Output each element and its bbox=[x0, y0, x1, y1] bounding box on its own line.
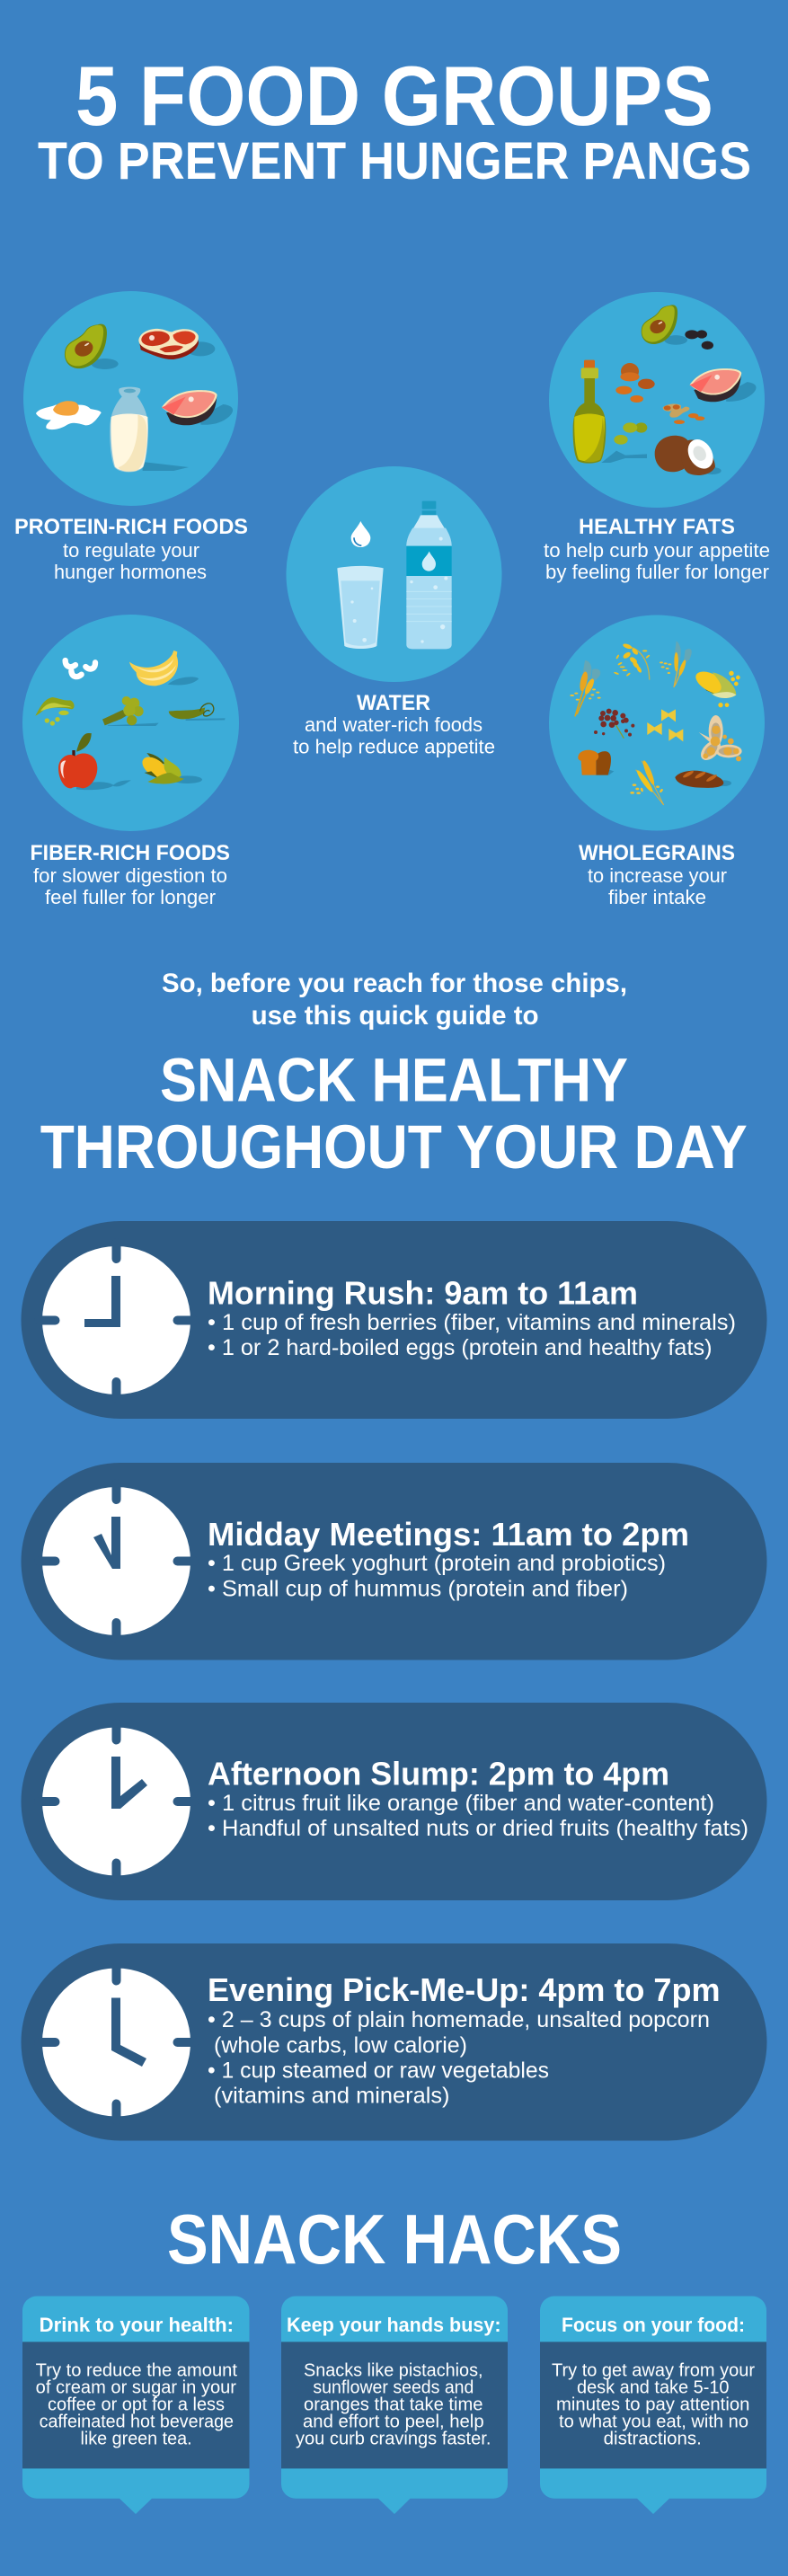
card text bbox=[36, 2360, 237, 2448]
card text: you curb cravings faster. bbox=[296, 2429, 491, 2448]
protein label bbox=[14, 515, 248, 583]
icon: wholegrain foods bbox=[570, 641, 742, 805]
schedule text: • 1 cup of fresh berries (fiber, vitamins and minerals) bbox=[208, 1310, 736, 1335]
card text: Try to get away from your bbox=[552, 2360, 755, 2380]
card body bbox=[540, 2341, 766, 2468]
icon: fiber foods bbox=[35, 651, 226, 790]
panel: morning rush bbox=[22, 1221, 767, 1419]
heading: snack healthy: SNACK HEALTHY bbox=[160, 1046, 628, 1115]
schedule text: (whole carbs, low calorie) bbox=[214, 2033, 467, 2058]
panel: wholegrains bbox=[549, 615, 765, 908]
intro text: use this quick guide to bbox=[252, 1001, 539, 1031]
water label: and water-rich foods bbox=[305, 713, 483, 736]
schedule text: • 2 – 3 cups of plain homemade, unsalted popcorn bbox=[208, 2007, 710, 2032]
card text: like green tea. bbox=[81, 2429, 192, 2448]
title: TO PREVENT HUNGER PANGS bbox=[38, 132, 751, 190]
card: drink to your health bbox=[22, 2297, 250, 2514]
card body bbox=[22, 2341, 250, 2468]
card text: and effort to peel, help bbox=[303, 2412, 484, 2431]
wholegrains label: fiber intake bbox=[608, 886, 706, 908]
card text bbox=[552, 2360, 755, 2448]
heading: snack healthy bbox=[40, 1046, 748, 1182]
card text: to what you eat, with no bbox=[559, 2412, 748, 2431]
schedule text: • 1 cup steamed or raw vegetables bbox=[208, 2058, 549, 2083]
title: 5 FOOD GROUPS bbox=[75, 49, 713, 143]
schedule text: Morning Rush: 9am to 11am bbox=[208, 1275, 638, 1312]
schedule text bbox=[208, 1516, 689, 1602]
fiber label: FIBER-RICH FOODS bbox=[31, 841, 230, 865]
card text: sunflower seeds and bbox=[313, 2377, 474, 2397]
title bbox=[38, 49, 751, 190]
fats label: to help curb your appetite bbox=[544, 539, 770, 562]
panel: midday meetings bbox=[22, 1463, 767, 1660]
schedule text: (vitamins and minerals) bbox=[214, 2084, 449, 2109]
icon: fats foods bbox=[573, 305, 757, 475]
card text: oranges that take time bbox=[304, 2395, 483, 2414]
panel: protein-rich foods bbox=[14, 291, 248, 583]
card text: caffeinated hot beverage bbox=[40, 2412, 234, 2431]
card text: coffee or opt for a less bbox=[48, 2395, 225, 2414]
schedule text: Evening Pick-Me-Up: 4pm to 7pm bbox=[208, 1971, 721, 2008]
water label: to help reduce appetite bbox=[293, 735, 495, 758]
schedule text: • 1 cup Greek yoghurt (protein and probiotics) bbox=[208, 1551, 666, 1576]
wholegrains label bbox=[579, 841, 735, 908]
pill background bbox=[22, 1221, 767, 1419]
icon: clock 4:00 bbox=[39, 1964, 194, 2120]
panel: fiber-rich foods bbox=[22, 615, 239, 908]
schedule text: • 1 citrus fruit like orange (fiber and water-content) bbox=[208, 1791, 714, 1816]
fiber label: for slower digestion to bbox=[33, 864, 227, 887]
card text: of cream or sugar in your bbox=[36, 2377, 236, 2397]
schedule text bbox=[208, 1971, 721, 2109]
card text: minutes to pay attention bbox=[556, 2395, 749, 2414]
water label: WATER bbox=[357, 691, 430, 715]
protein circle bbox=[23, 291, 238, 506]
panel: evening pick-me-up bbox=[22, 1943, 767, 2140]
panel: afternoon slump bbox=[22, 1703, 767, 1900]
fats label bbox=[544, 515, 770, 583]
heading: snack hacks: SNACK HACKS bbox=[167, 2200, 622, 2279]
card shape bbox=[540, 2297, 766, 2514]
icon: clock 9:00 bbox=[39, 1243, 194, 1398]
card: focus on your food bbox=[540, 2297, 766, 2514]
schedule text: • Handful of unsalted nuts or dried fruits (healthy fats) bbox=[208, 1816, 748, 1841]
card text: distractions. bbox=[604, 2429, 702, 2448]
card shape bbox=[22, 2297, 250, 2514]
wholegrains label: to increase your bbox=[588, 864, 727, 887]
card body bbox=[281, 2341, 508, 2468]
fiber label: feel fuller for longer bbox=[45, 886, 216, 908]
card heading: Focus on your food: bbox=[562, 2314, 745, 2336]
schedule text: • Small cup of hummus (protein and fiber) bbox=[208, 1577, 628, 1602]
protein label: hunger hormones bbox=[54, 561, 207, 583]
icon: protein foods bbox=[36, 324, 233, 472]
water circle bbox=[286, 466, 501, 682]
card heading: Drink to your health: bbox=[40, 2314, 234, 2336]
fats circle bbox=[549, 292, 765, 508]
icon: clock 2:00 bbox=[39, 1723, 194, 1880]
pill background bbox=[22, 1703, 767, 1900]
wholegrains circle bbox=[549, 615, 765, 830]
schedule text bbox=[208, 1756, 748, 1841]
fiber label bbox=[31, 841, 230, 908]
fats label: HEALTHY FATS bbox=[579, 515, 735, 539]
schedule text: Afternoon Slump: 2pm to 4pm bbox=[208, 1756, 669, 1793]
fats label: by feeling fuller for longer bbox=[545, 561, 769, 583]
pill background bbox=[22, 1943, 767, 2140]
card text: desk and take 5-10 bbox=[577, 2377, 730, 2397]
schedule text: Midday Meetings: 11am to 2pm bbox=[208, 1516, 689, 1553]
schedule text: • 1 or 2 hard-boiled eggs (protein and healthy fats) bbox=[208, 1335, 712, 1360]
intro text: So, before you reach for those chips, bbox=[162, 969, 627, 998]
schedule text bbox=[208, 1275, 736, 1360]
card text bbox=[296, 2360, 491, 2448]
protein label: PROTEIN-RICH FOODS bbox=[14, 515, 248, 539]
panel: water bbox=[286, 466, 501, 758]
icon: clock 11:00 bbox=[39, 1483, 194, 1639]
card text: Try to reduce the amount bbox=[36, 2360, 237, 2380]
icon: water glass and bottle bbox=[337, 501, 452, 649]
panel: healthy fats bbox=[544, 292, 770, 583]
card text: Snacks like pistachios, bbox=[304, 2360, 483, 2380]
pill background bbox=[22, 1463, 767, 1660]
protein label: to regulate your bbox=[63, 539, 199, 562]
fiber circle bbox=[22, 615, 239, 831]
card heading: Keep your hands busy: bbox=[287, 2314, 501, 2336]
card: keep your hands busy bbox=[281, 2297, 508, 2514]
water label bbox=[293, 691, 495, 758]
intro text bbox=[162, 969, 627, 1031]
card shape bbox=[281, 2297, 508, 2514]
wholegrains label: WHOLEGRAINS bbox=[579, 841, 735, 865]
